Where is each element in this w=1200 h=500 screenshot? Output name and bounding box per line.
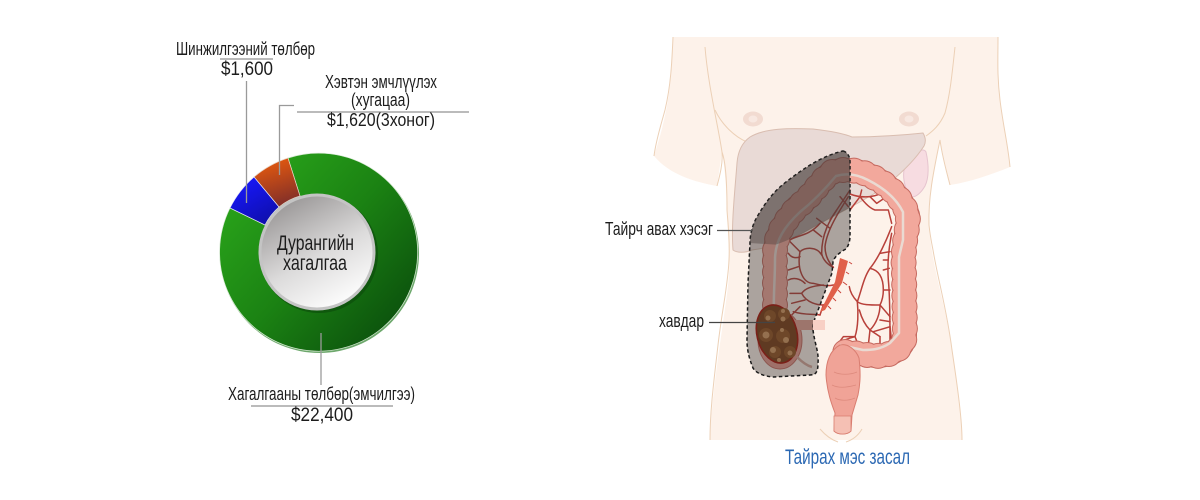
center label: хагалгаа	[283, 252, 347, 275]
center label	[277, 232, 354, 275]
leader: surgery cost	[320, 333, 322, 385]
slice: hospital stay orange	[254, 158, 300, 207]
label: surgery cost: Хагалгааны төлбөр(эмчилгээ)	[228, 384, 415, 404]
donut chart	[220, 153, 419, 353]
label: surgery cost	[228, 384, 415, 426]
donut drop rim	[220, 154, 419, 353]
label: examination cost: Шинжилгээний төлбөр	[176, 39, 315, 59]
label: examination cost	[176, 39, 315, 80]
center hub	[258, 194, 378, 313]
label: hospital stay cost: Хэвтэн эмчлүүлэх	[325, 72, 437, 92]
slice: surgery cost green	[220, 153, 418, 351]
stomach	[904, 150, 928, 197]
body contour lines	[654, 37, 1010, 442]
ileum stump	[813, 320, 825, 330]
leader: examination	[246, 81, 248, 203]
leader: hospital stay	[280, 106, 294, 175]
sigmoid and rectum	[826, 345, 860, 434]
liver	[732, 129, 925, 252]
center label: Дурангийн	[277, 232, 354, 255]
label: hospital stay cost	[297, 72, 469, 130]
tumor	[750, 301, 804, 367]
mesentery blood vessels	[788, 190, 892, 347]
label: hospital stay cost: $1,620(3хоног)	[327, 110, 435, 130]
superior rectal artery stump	[820, 258, 852, 312]
label: surgery cost: $22,400	[291, 405, 353, 426]
nipples	[743, 112, 919, 126]
caption: Тайрах мэс засал	[785, 446, 910, 469]
label: resection area: Тайрч авах хэсэг	[605, 219, 713, 239]
label: examination cost: $1,600	[221, 59, 273, 80]
label: tumor: хавдар	[659, 311, 704, 331]
anatomy illustration	[654, 37, 1010, 442]
cecum and terminal ileum	[758, 311, 815, 369]
resection area: dashed shaded region	[747, 151, 850, 377]
label: hospital stay cost: (хугацаа)	[351, 90, 410, 110]
colon: ascending, transverse, descending	[774, 170, 908, 356]
label: tumor	[659, 311, 775, 331]
slice: examination blue	[230, 177, 279, 225]
body silhouette	[654, 37, 1010, 440]
